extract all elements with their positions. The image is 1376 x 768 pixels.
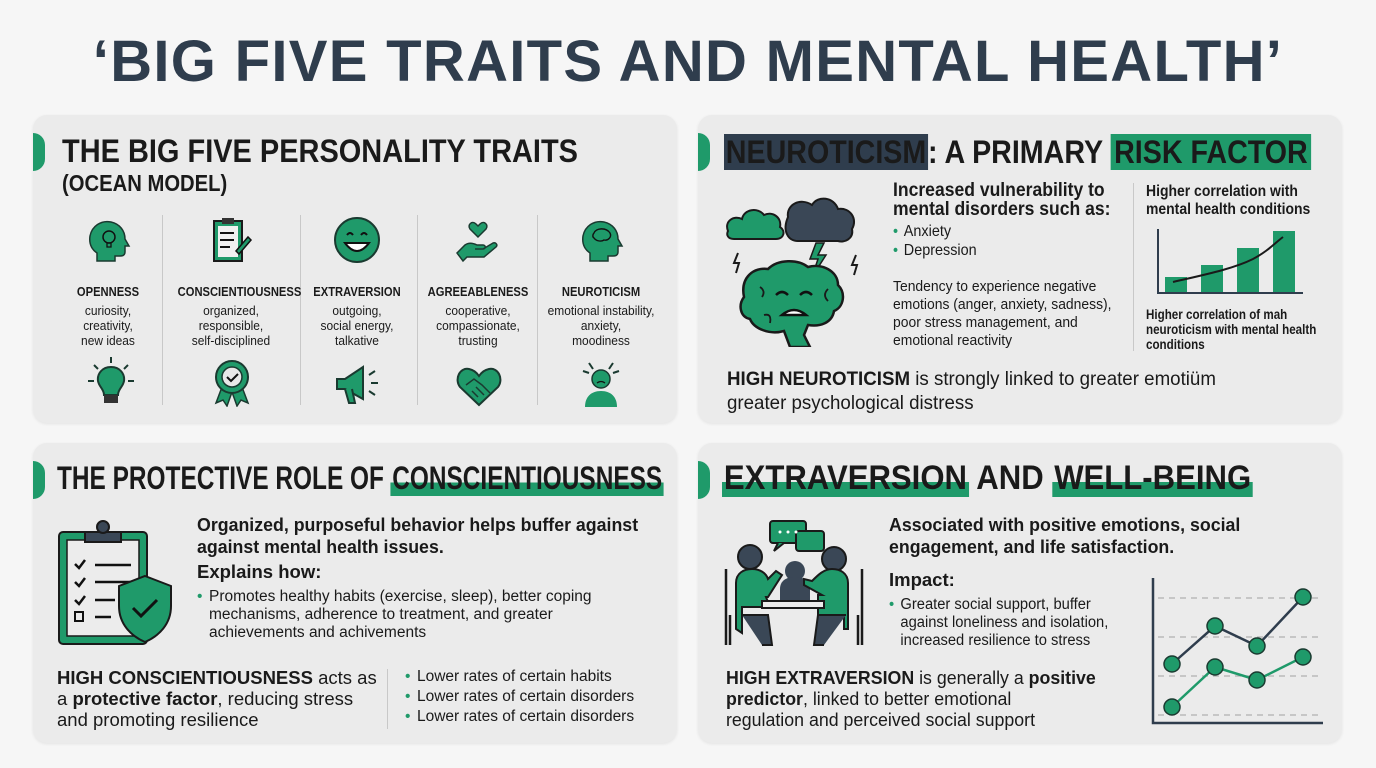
text: high extraversion: HIGH EXTRAVERSION is generally a positive [726,667,1096,688]
text: organized behavior [197,514,638,557]
trait: extraversion [313,217,401,348]
chart caption top: mental health conditions [1146,201,1310,218]
icon: people talking at table [724,520,864,646]
panel: protective role of conscientiousness [33,443,677,743]
trait: conscientiousness: CONSCIENTIOUSNESS [178,284,301,299]
text: vulnerability: Depression [904,242,977,259]
bar chart [1157,229,1303,294]
icon: stressed person [582,362,620,407]
chart caption top: Higher correlation with [1146,183,1298,200]
trait: neuroticism: NEUROTICISM [562,284,640,299]
panel: neuroticism risk factor [698,115,1342,423]
text: explains how: Explains how: [197,561,321,582]
chart caption bottom: neuroticism with mental health [1146,322,1316,337]
icon: smiley [334,217,380,263]
subheading: (OCEAN MODEL) [62,170,227,196]
text: vulnerability [893,179,1111,259]
trait: extraversion: outgoing, [332,303,382,318]
text: explains how [197,561,592,641]
text: high extraversion: predictor, linked to better emotional [726,688,1011,709]
text: associated: engagement, and life satisfaction. [889,536,1174,557]
heading: neuroticism: NEUROTICISM: A PRIMARY RISK FACTOR [726,134,1308,170]
trait: agreeableness: compassionate, [436,318,520,333]
text: high neuroticism: HIGH NEUROTICISM is strongly linked to greater emotiüm [727,368,1216,390]
title: ‘BIG FIVE TRAITS AND MENTAL HEALTH’ [93,29,1283,94]
icon: head with brain [582,220,624,262]
line chart [1152,578,1323,724]
text: high extraversion: regulation and perceived social support [726,709,1035,730]
text: organized behavior: against mental health issues. [197,536,444,557]
text: impact: against loneliness and isolation, [900,614,1108,631]
trait: extraversion: social energy, [321,318,393,333]
text: associated: Associated with positive emotions, social [889,514,1240,535]
icon: head with bulb [89,220,130,262]
icon: heart handshake [456,368,502,406]
trait: neuroticism: moodiness [572,333,630,348]
text: associated [889,514,1240,557]
trait: agreeableness: AGREEABLENESS [428,284,528,299]
trait: neuroticism: anxiety, [581,318,621,333]
icon: stressed brain with clouds [726,198,858,347]
icon: megaphone [336,365,378,404]
text: impact [889,569,1108,649]
trait: conscientiousness [178,218,301,348]
chart caption top [1146,183,1310,218]
trait: openness: new ideas [81,333,135,348]
trait: conscientiousness: responsible, [199,318,263,333]
icon: clipboard [213,218,252,262]
text: high neuroticism [727,368,1216,414]
trait: agreeableness: cooperative, [445,303,511,318]
list: lower rates: Lower rates of certain habits [417,668,612,685]
icon: clipboard with shield [58,520,172,645]
trait: openness [77,220,139,348]
heading: conscientiousness: THE PROTECTIVE ROLE OF CONSCIENTIOUSNESS [57,460,662,496]
list: lower rates: Lower rates of certain disorders [417,688,634,705]
trait: conscientiousness: organized, [203,303,259,318]
text: impact: Impact: [889,569,955,590]
text: organized behavior: Organized, purposeful behavior helps buffer against [197,514,638,535]
trait: extraversion: EXTRAVERSION [313,284,401,299]
panel: extraversion and well-being [698,443,1342,743]
trait: agreeableness: trusting [458,333,498,348]
chart caption bottom [1146,307,1316,352]
text: tendency: Tendency to experience negative emotions (anger, anxiety, sadness), poor stress management, and emotional reactivity [893,279,1112,349]
text: high neuroticism: greater psychological distress [727,392,974,414]
trait: openness: curiosity, [85,303,131,318]
trait: conscientiousness: self-disciplined [192,333,270,348]
chart caption bottom: conditions [1146,337,1205,352]
text: vulnerability: Increased vulnerability to [893,179,1105,201]
text: high extraversion [726,667,1096,730]
text: impact: increased resilience to stress [900,632,1090,649]
text: impact: Greater social support, buffer [900,596,1091,613]
text: high conscientiousness: HIGH CONSCIENTIOUSNESS acts as a protective factor, reducing stress and promoting resilience [57,667,377,730]
trait: openness: OPENNESS [77,284,139,299]
heading: big five: THE BIG FIVE PERSONALITY TRAITS [62,133,578,169]
heading: extraversion: EXTRAVERSION AND WELL-BEING [724,459,1251,497]
text: vulnerability: Anxiety [904,223,951,240]
trait: openness: creativity, [83,318,133,333]
list: lower rates [406,668,634,725]
trait: agreeableness [428,222,528,348]
text: explains how: Promotes healthy habits (exercise, sleep), better coping mechanisms, adherence to treatment, and greater achievements and achivements [209,588,592,641]
trait: extraversion: talkative [335,333,379,348]
trait: neuroticism [548,220,654,348]
list: lower rates: Lower rates of certain disorders [417,708,634,725]
panel: big five traits [33,115,677,423]
icon: hand with heart [456,222,498,262]
chart caption bottom: Higher correlation of mah [1146,307,1287,322]
text: vulnerability: mental disorders such as: [893,198,1111,220]
icon: award ribbon [214,360,250,407]
trait: neuroticism: emotional instability, [548,303,654,318]
icon: light bulb [88,357,134,403]
